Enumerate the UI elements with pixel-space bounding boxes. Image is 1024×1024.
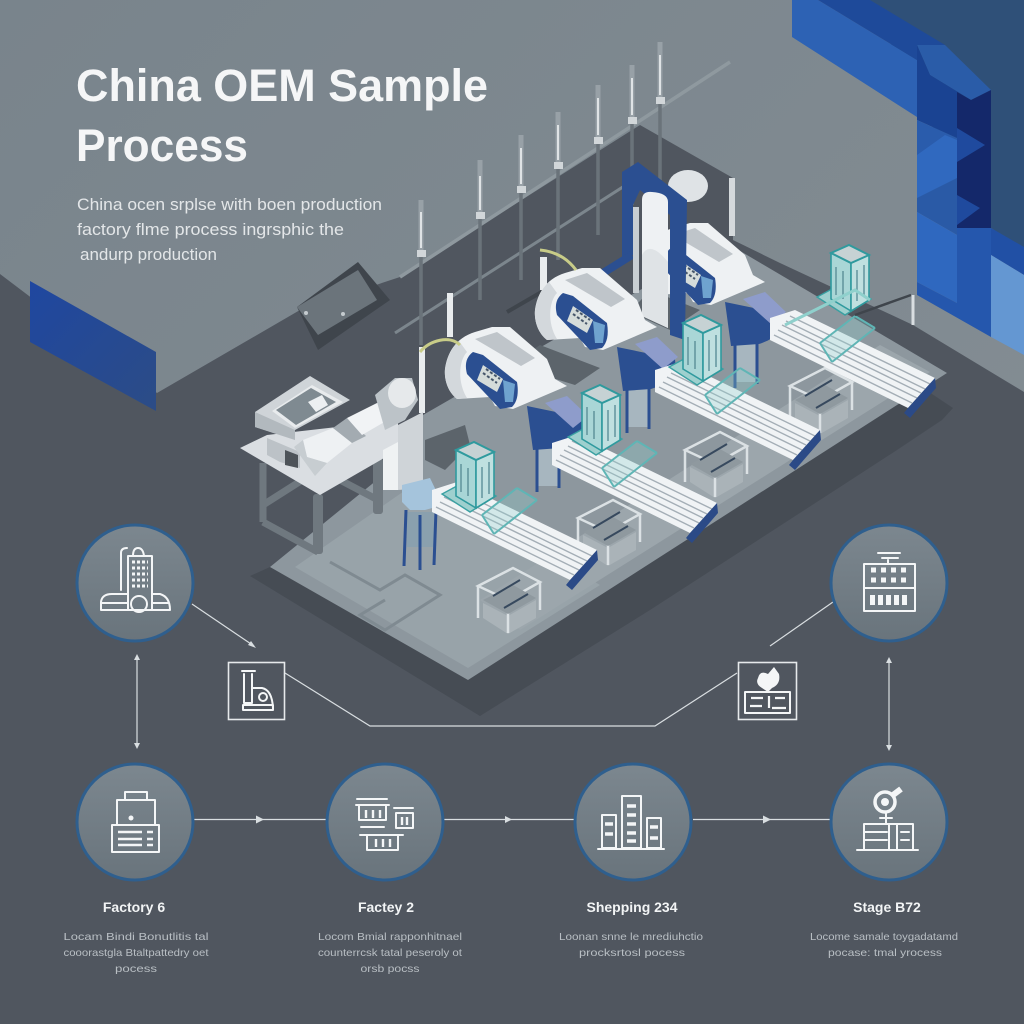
step 4 label: pocase: tmal yrocess (828, 947, 942, 959)
coolant pipes (420, 250, 576, 352)
inner floor inset (295, 480, 600, 668)
node: shipping buildings icon (575, 764, 691, 880)
node: stage inspection icon (831, 764, 947, 880)
white wall stubs (419, 257, 547, 413)
conveyor line 1 (432, 482, 598, 590)
connector: arrow 3 to 4 (693, 816, 830, 824)
conveyor line 3 (655, 362, 821, 470)
connector: top left diagonal arrow (192, 604, 256, 648)
step 3 label (559, 899, 703, 959)
connector: top right diagonal line (770, 602, 833, 646)
hopper and legs of line 1 (402, 478, 443, 570)
step 3 label: Shepping 234 (586, 899, 678, 915)
step 1 label (64, 899, 209, 975)
gantry arm over line 4 (785, 290, 913, 325)
tower unit 1 (442, 442, 496, 512)
conveyor support frames (478, 368, 852, 634)
wall shelf bracket (297, 262, 390, 350)
conveyor line 4 (770, 310, 936, 418)
blue column with white pillar (603, 162, 708, 340)
connector: arrow 1 to 2 (194, 816, 327, 824)
title: China OEM Sample (76, 60, 488, 111)
step 2 label: Factey 2 (358, 899, 414, 915)
machine station 2 (535, 268, 678, 433)
step 4 label: Locome samale toygadatamd (810, 931, 958, 943)
tower unit 4 (817, 245, 871, 315)
subtitle: China ocen srplse with boen production (77, 196, 382, 214)
machine station 3 (643, 223, 786, 388)
connector: right double arrow (886, 657, 892, 751)
tower unit 2 (568, 385, 622, 455)
light front floor strip (480, 345, 930, 630)
title: Process (76, 120, 248, 171)
blue wall panel left (30, 281, 156, 411)
platform shadow (250, 373, 953, 716)
title (76, 60, 488, 171)
step 2 label: counterrcsk tatal peseroly ot (318, 947, 462, 959)
step 4 label: Stage B72 (853, 899, 921, 915)
step 3 label: Loonan snne le mrediuhctio (559, 931, 703, 943)
subtitle (77, 196, 382, 264)
step 3 label: procksrtosl pocess (579, 947, 685, 959)
subtitle: factory flme process ingrsphic the (77, 221, 344, 239)
step 4 label (810, 899, 958, 959)
machine station 1 (445, 327, 588, 492)
step 2 label: orsb pocss (360, 963, 420, 975)
wall rails and posts (395, 42, 735, 345)
step 2 label: Locom Bmial rapponhitnael (318, 931, 462, 943)
node: factory 6 icon (77, 764, 193, 880)
node: factory 2 icon (327, 764, 443, 880)
connector: centre link between square icons (285, 673, 737, 726)
step 1 label: Factory 6 (103, 899, 165, 915)
square icon: packing (738, 662, 796, 720)
square icon: machine (228, 662, 284, 720)
node: top right control panel icon (831, 525, 947, 641)
blue wall panels right (792, 0, 1024, 355)
floor piping outline (330, 562, 440, 630)
factory platform (270, 245, 947, 680)
subtitle: andurp production (80, 246, 217, 264)
step 2 label (318, 899, 462, 975)
conveyor line 2 (552, 435, 718, 543)
connector: left double arrow (134, 654, 140, 749)
connector: arrow 2 to 3 (444, 816, 575, 823)
machine floor shadows (425, 290, 700, 470)
step 1 label: Locam Bindi Bonutlitis tal (64, 931, 208, 943)
step 1 label: cooorastgla Btaltpattedry oet (64, 947, 209, 959)
left machine on table (240, 376, 423, 554)
tower unit 3 (669, 315, 723, 385)
step 1 label: pocess (115, 963, 157, 975)
node: top left machine icon (77, 525, 193, 641)
